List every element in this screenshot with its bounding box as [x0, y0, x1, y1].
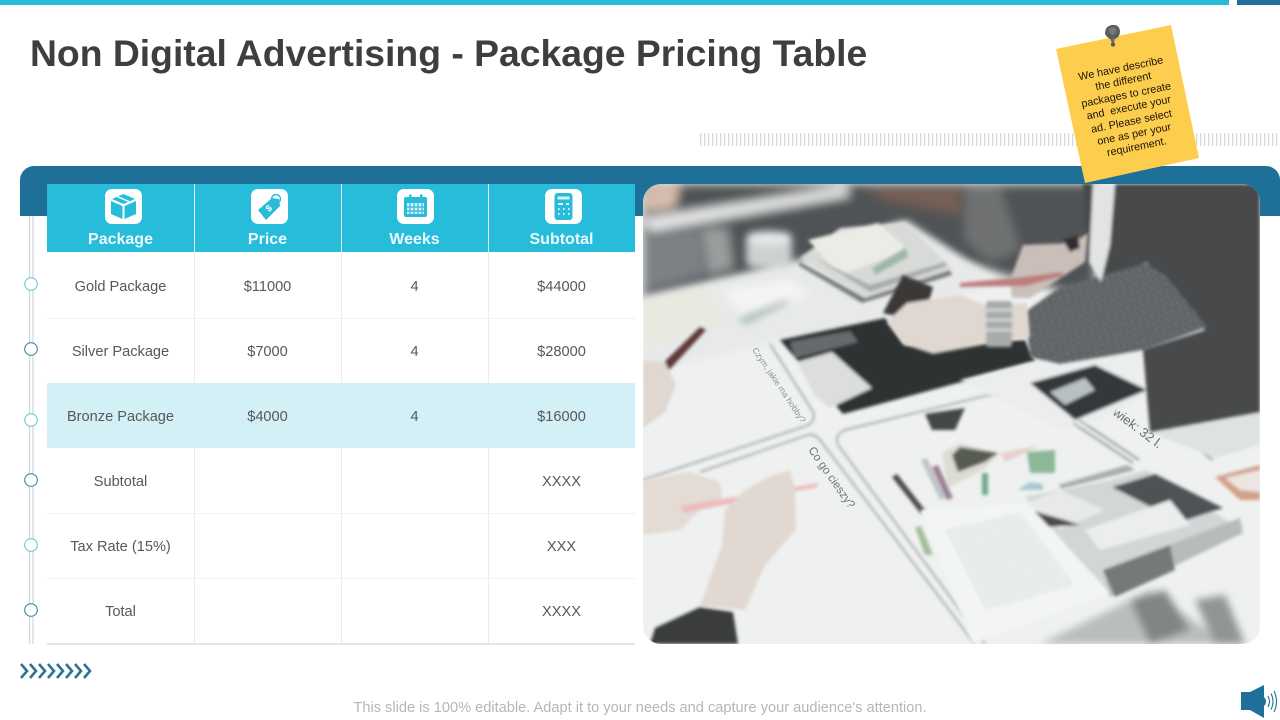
photo: people working on printed layouts: [643, 184, 1260, 644]
row: bronze package: $16000: [537, 409, 586, 425]
pens and small items: [892, 443, 1260, 555]
row: total: XXXX: [542, 604, 581, 620]
hands holding scissors and print: [643, 233, 1088, 428]
row: total: [105, 604, 581, 620]
row: tax rate: [70, 539, 576, 555]
highlighted bronze row: [47, 383, 635, 448]
black and white photo on table: [780, 318, 1035, 430]
note text: one as per your: [1096, 121, 1172, 148]
icon: package box: [105, 189, 142, 224]
row: bronze package: Bronze Package: [67, 409, 174, 425]
chevron row: [20, 663, 92, 679]
layout sheets: [643, 344, 1030, 644]
pricing table: [47, 184, 635, 645]
row: gold package: 4: [410, 279, 419, 295]
row: silver package: Silver Package: [72, 344, 169, 360]
column headings: Price: [248, 231, 287, 248]
note text: and execute your: [1086, 94, 1172, 123]
row: gold package: $44000: [537, 279, 586, 295]
note text: the different: [1094, 70, 1153, 94]
row: gold package: [75, 279, 586, 295]
icon: price tag: [251, 189, 288, 224]
icon: price tag: $: [264, 203, 274, 214]
row: subtotal: XXXX: [542, 474, 581, 490]
row: subtotal: Subtotal: [94, 474, 147, 490]
handwritten notes: Czym, jakie ma hobby?: [750, 346, 808, 425]
note text: [1077, 54, 1173, 160]
row: silver package: $7000: [247, 344, 288, 360]
row: total: Total: [105, 604, 136, 620]
row: tax rate: XXX: [547, 539, 576, 555]
row: gold package: Gold Package: [75, 279, 166, 295]
row: silver package: [72, 344, 586, 360]
note text: packages to create: [1080, 80, 1172, 110]
icon: calculator: [545, 189, 582, 224]
handwritten notes: Co go cieszy?: [806, 445, 857, 511]
note text: requirement.: [1106, 136, 1168, 160]
row: gold package: $11000: [244, 279, 291, 295]
icon: speaker: [1241, 685, 1278, 718]
column headings: [88, 231, 594, 248]
handwritten notes: [750, 346, 1165, 511]
blurred background: [643, 184, 1095, 300]
note text: ad. Please select: [1090, 107, 1173, 135]
hands with pink pen: [643, 470, 818, 644]
column headings: Weeks: [389, 231, 440, 248]
sticky note: [1056, 25, 1199, 183]
row: subtotal: [94, 474, 581, 490]
blue header band: [20, 166, 1280, 216]
timeline: [24, 216, 38, 644]
footer note: This slide is 100% editable. Adapt it to your needs and capture your audience's attention.: [353, 700, 927, 716]
magazine stack: [798, 222, 952, 303]
sweater: [1025, 184, 1260, 432]
icon: push pin: [1105, 24, 1120, 47]
note paper: [1056, 25, 1199, 183]
row: silver package: $28000: [537, 344, 586, 360]
row: bronze package: $4000: [247, 409, 288, 425]
small photos under sleeve: [960, 350, 1260, 489]
open magazine: [920, 470, 1243, 644]
title: Non Digital Advertising - Package Pricing Table: [30, 32, 867, 74]
column headings: Subtotal: [530, 231, 594, 248]
row: bronze package: 4: [410, 409, 419, 425]
top corner block: [1237, 0, 1280, 5]
top accent bar: [0, 0, 1229, 5]
row: silver package: 4: [410, 344, 419, 360]
note text: We have describe: [1077, 54, 1164, 83]
hatched strip: [700, 133, 1278, 146]
row: tax rate: Tax Rate (15%): [70, 539, 171, 555]
icon: calendar: [397, 189, 434, 224]
table header row: [47, 184, 635, 252]
row: bronze package: [67, 409, 586, 425]
column headings: Package: [88, 231, 153, 248]
table grid lines: [47, 184, 635, 645]
handwritten notes: wiek: 32 l.: [1109, 404, 1165, 451]
